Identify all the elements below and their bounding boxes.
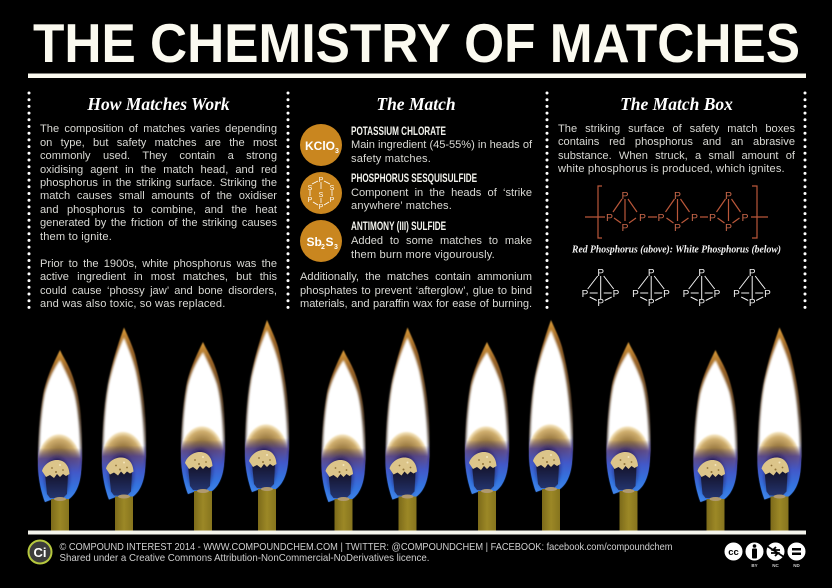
- text: match box description: contains red phosphorus and an abrasive: [558, 136, 795, 148]
- ingredient text: phosphorus sesquisulfide: anywhere’ matches.: [351, 200, 452, 212]
- red phosphorus structure: P: [741, 212, 749, 224]
- red phosphorus structure: P: [606, 212, 613, 224]
- red phosphorus structure: P: [725, 222, 732, 234]
- icon: Sb2S3 badge: Sb: [306, 235, 322, 249]
- Creative Commons licence icons: cc: [728, 547, 739, 558]
- text: additional ingredients: phosphates to prevent ‘afterglow’, glue to bind: [300, 285, 532, 297]
- Compound Interest logo: [28, 540, 52, 564]
- text: how matches work first paragraph: phosphorus in the striking surface. Striking the: [40, 177, 277, 189]
- icon: P4S3 badge: S: [330, 185, 335, 192]
- ingredient text: antimony sulfide: them burn more vigourously.: [351, 249, 495, 261]
- Creative Commons licence icons: ND: [793, 563, 800, 568]
- text: match box description: The striking surface of safety match boxes: [558, 123, 795, 135]
- text: how matches work first paragraph: match causes small amounts of the oxidiser: [40, 190, 277, 202]
- red phosphorus structure: [585, 186, 768, 238]
- column dotted separators: [29, 93, 805, 313]
- footer licence line: Shared under a Creative Commons Attribution-NonCommercial-NoDerivatives licence.: [60, 553, 430, 564]
- red phosphorus structure: P: [674, 222, 681, 234]
- text: how matches work first paragraph: and phosphorus to combine, and the heat: [40, 204, 277, 216]
- match flame 2: [98, 328, 150, 546]
- white phosphorus structures: P: [597, 268, 604, 279]
- match flame 4: [241, 320, 293, 539]
- white phosphorus structures: P: [714, 289, 721, 300]
- match flame 10: [690, 350, 742, 549]
- ingredient text: antimony sulfide: [351, 235, 532, 261]
- match flame 9: [602, 342, 654, 541]
- icon: P4S3 badge: S: [319, 192, 324, 199]
- row of burning matches: [34, 320, 806, 549]
- text: match box description: substance. When struck, a small amount of: [558, 150, 795, 162]
- icon: Sb2S3 badge: 2: [321, 244, 325, 251]
- Creative Commons licence icons: BY: [751, 563, 758, 568]
- icon: P4S3 badge: P: [330, 197, 335, 204]
- title: THE CHEMISTRY OF MATCHES: [33, 13, 800, 74]
- icon: Sb2S3 badge: S: [326, 235, 334, 249]
- icon: P4S3 badge: S: [308, 185, 313, 192]
- white phosphorus structures: P: [698, 268, 705, 279]
- text: how matches work second paragraph: [40, 258, 277, 310]
- icon: KClO3 badge: 3: [335, 148, 339, 155]
- red phosphorus structure: P: [657, 212, 665, 224]
- ingredient text: potassium chlorate: [351, 139, 532, 165]
- match flame 1: [34, 350, 86, 549]
- Compound Interest logo: Ci: [34, 545, 46, 560]
- heading: The Match Box: The Match Box: [620, 94, 733, 114]
- red phosphorus structure: P: [621, 190, 629, 202]
- icon: Sb2S3 badge: 3: [334, 244, 338, 251]
- icon: P4S3 badge: P: [308, 197, 313, 204]
- text: how matches work second paragraph: Prior to the 1900s, white phosphorus was the: [40, 258, 277, 270]
- heading: The Match: The Match: [376, 94, 456, 114]
- red phosphorus structure: P: [639, 212, 646, 224]
- white phosphorus structures: P: [764, 289, 771, 300]
- white phosphorus structures: P: [698, 298, 705, 309]
- ingredient heading: potassium chlorate: POTASSIUM CHLORATE: [351, 124, 446, 138]
- caption: red and white phosphorus: Red Phosphorus (above): White Phosphorus (below): [571, 244, 781, 256]
- white phosphorus structures: P: [733, 289, 740, 300]
- text: how matches work first paragraph: them to ignite.: [40, 231, 112, 243]
- ingredient text: potassium chlorate: safety matches.: [351, 153, 431, 165]
- text: additional ingredients: Additionally, the matches contain ammonium: [300, 271, 532, 283]
- white phosphorus structures: P: [749, 268, 756, 279]
- red phosphorus structure: P: [725, 190, 732, 202]
- text: how matches work second paragraph: active ingredient in most matches, but this: [40, 271, 277, 283]
- match flame 7: [461, 342, 513, 541]
- title underline: [28, 74, 806, 78]
- white phosphorus structures: P: [597, 298, 604, 309]
- text: how matches work first paragraph: oxidising agent in the match head, and red: [40, 164, 277, 176]
- icon: Sb2S3 badge: [300, 220, 342, 262]
- ingredient text: phosphorus sesquisulfide: [351, 187, 532, 212]
- icon: P4S3 badge: [300, 172, 342, 214]
- match flame 5: [318, 350, 370, 549]
- white phosphorus structures: [582, 268, 771, 309]
- text: match box description: [558, 123, 795, 175]
- text: how matches work first paragraph: on type, but safety matches are the most: [40, 137, 277, 149]
- icon: KClO3 badge: KClO: [305, 139, 335, 153]
- white phosphorus structures: P: [749, 298, 756, 309]
- icon: P4S3 badge: P: [319, 204, 324, 211]
- Creative Commons licence icons: NC: [772, 563, 779, 568]
- footer credit line: © COMPOUND INTEREST 2014 - WWW.COMPOUNDCHEM.COM | TWITTER: @COMPOUNDCHEM | FACEBOOK: facebook.com/compoundchem: [60, 542, 672, 553]
- red phosphorus structure: P: [621, 222, 629, 234]
- match flame 8: [525, 320, 577, 539]
- text: match box description: white phosphorus is produced, which ignites.: [558, 163, 785, 175]
- white phosphorus structures: P: [683, 289, 690, 300]
- Creative Commons licence icons: [724, 542, 806, 568]
- text: additional ingredients: materials, and paraffin wax for ease of burning.: [300, 298, 532, 310]
- white phosphorus structures: P: [648, 268, 655, 279]
- heading: How Matches Work: How Matches Work: [87, 94, 230, 114]
- icon: KClO3 badge: [300, 124, 342, 166]
- match flame 11: [754, 328, 806, 546]
- ingredient text: phosphorus sesquisulfide: Component in the heads of ‘strike: [351, 187, 532, 199]
- text: how matches work first paragraph: The composition of matches varies depending: [40, 123, 277, 135]
- ingredient text: antimony sulfide: Added to some matches to make: [351, 235, 532, 247]
- text: additional ingredients: [300, 271, 532, 310]
- text: how matches work second paragraph: and was also toxic, so was replaced.: [40, 298, 225, 310]
- text: how matches work first paragraph: generated by the friction of the striking causes: [40, 217, 277, 229]
- red phosphorus structure: P: [691, 212, 698, 224]
- text: how matches work first paragraph: [40, 123, 277, 243]
- match flame 3: [177, 342, 229, 541]
- icon: P4S3 badge: P: [319, 177, 324, 184]
- text: how matches work first paragraph: commonly used. They contain a strong: [40, 150, 277, 162]
- ingredient text: potassium chlorate: Main ingredient (45-55%) in heads of: [351, 139, 532, 151]
- white phosphorus structures: P: [632, 289, 639, 300]
- match flame 6: [382, 328, 434, 546]
- white phosphorus structures: P: [648, 298, 655, 309]
- ingredient heading: antimony sulfide: ANTIMONY (III) SULFIDE: [351, 219, 446, 233]
- text: how matches work second paragraph: could cause ‘phossy jaw’ and bone disorders,: [40, 285, 277, 297]
- ingredient heading: phosphorus sesquisulfide: PHOSPHORUS SESQUISULFIDE: [351, 171, 477, 185]
- footer rule: [28, 530, 806, 534]
- red phosphorus structure: P: [709, 212, 716, 224]
- red phosphorus structure: P: [674, 190, 681, 202]
- white phosphorus structures: P: [663, 289, 670, 300]
- white phosphorus structures: P: [582, 289, 589, 300]
- white phosphorus structures: P: [613, 289, 620, 300]
